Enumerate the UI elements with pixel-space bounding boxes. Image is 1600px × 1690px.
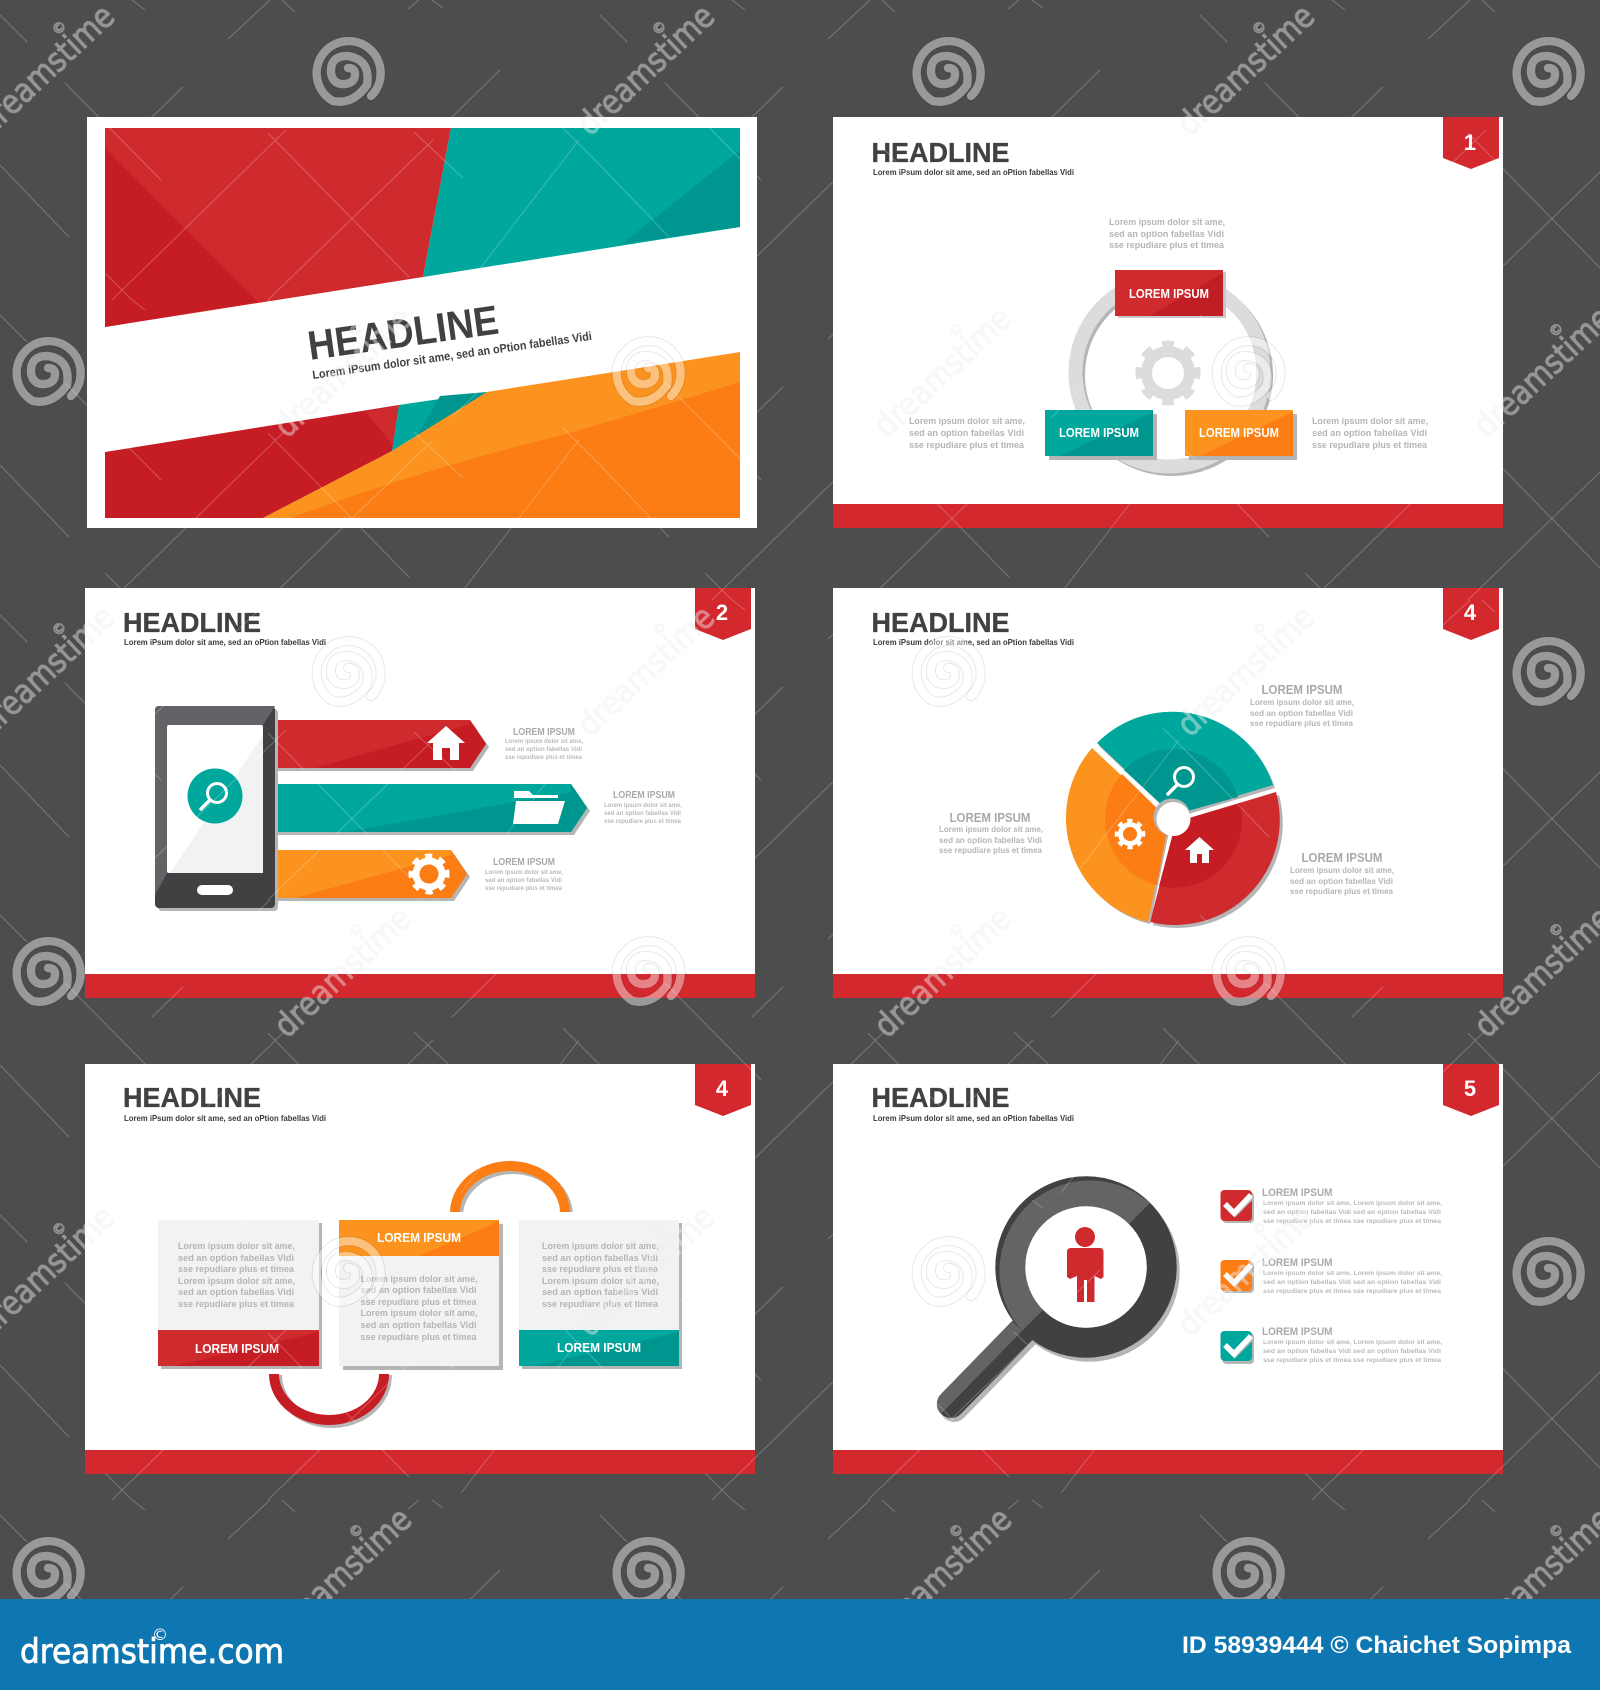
watermark wordmarks: © xyxy=(49,1219,70,1240)
label: red sector: sse repudiare plus et timea xyxy=(1290,886,1393,896)
red arrow xyxy=(275,720,489,771)
left card text xyxy=(178,1241,295,1310)
checklist item red: sed an option fabellas Vidi sed an option fabellas Vidi xyxy=(1263,1209,1441,1216)
watermark wordmarks: © xyxy=(346,320,367,341)
footer logo: dreamstime.com xyxy=(20,1632,284,1672)
left card text: Lorem ipsum dolor sit ame, xyxy=(178,1241,295,1252)
label: red sector: LOREM IPSUM xyxy=(1302,850,1382,865)
cover: small teal facet xyxy=(392,392,487,451)
watermark spiral ghost edges xyxy=(70,336,1286,1596)
right text block: Lorem ipsum dolor sit ame, xyxy=(1312,416,1428,427)
watermark wordmarks: dreamstime xyxy=(569,597,722,744)
watermark wordmarks: © xyxy=(1249,619,1270,640)
middle card xyxy=(339,1220,503,1370)
badge number: 4 xyxy=(1464,600,1477,625)
label: orange sector: sse repudiare plus et timea xyxy=(939,845,1042,855)
badge number: 1 xyxy=(1464,130,1476,155)
left card footer xyxy=(158,1330,319,1366)
checklist item red xyxy=(1220,1187,1442,1225)
icon: folder xyxy=(513,791,565,824)
label: orange arrow: Lorem ipsum dolor sit ame, xyxy=(485,869,563,876)
red connector arc xyxy=(274,1374,387,1423)
footer band xyxy=(0,1599,1600,1690)
label: orange sector xyxy=(939,810,1043,855)
watermark wordmarks: © xyxy=(1546,320,1567,341)
panel: cover slide xyxy=(87,117,757,528)
label: teal arrow: Lorem ipsum dolor sit ame, xyxy=(604,802,682,809)
left text block: sed an option fabellas Vidi xyxy=(909,428,1024,439)
left card text: sed an option fabellas Vidi xyxy=(178,1287,294,1298)
watermark wordmarks: © xyxy=(649,619,670,640)
heading: HEADLINE xyxy=(872,607,1010,638)
checklist item red: sse repudiare plus et timea sse repudiare plus et timea xyxy=(1263,1218,1441,1225)
label: teal sector: Lorem ipsum dolor sit ame, xyxy=(1250,697,1354,707)
footer credit: ID 58939444 © Chaichet Sopimpa xyxy=(1182,1632,1572,1659)
heading: HEADLINE xyxy=(123,607,261,638)
watermark wordmarks: dreamstime xyxy=(866,1499,1019,1646)
right card text: Lorem ipsum dolor sit ame, xyxy=(542,1276,659,1287)
red box: LOREM IPSUM xyxy=(1129,286,1209,301)
checklist item orange: sed an option fabellas Vidi sed an option fabellas Vidi xyxy=(1263,1279,1441,1286)
right card footer: LOREM IPSUM xyxy=(557,1340,641,1355)
top text block xyxy=(1109,217,1225,251)
icon: teal search circle xyxy=(188,768,242,824)
watermark wordmarks: © xyxy=(946,320,967,341)
panel: slide 4 pie diagram xyxy=(833,588,1503,998)
cover: red bottom facet xyxy=(105,405,399,518)
icon: gear xyxy=(1116,820,1144,848)
right text block xyxy=(1312,416,1428,451)
right card text: sse repudiare plus et timea xyxy=(542,1264,659,1275)
watermark wordmarks: © xyxy=(1249,1219,1270,1240)
watermark wordmarks: dreamstime xyxy=(866,898,1019,1045)
icon: house xyxy=(1185,837,1214,863)
right card text: Lorem ipsum dolor sit ame, xyxy=(542,1241,659,1252)
label: orange sector: LOREM IPSUM xyxy=(950,810,1030,825)
label: red arrow: sse repudiare plus et timea xyxy=(505,754,582,761)
checklist item orange: Lorem ipsum dolor sit ame, Lorem ipsum dolor sit ame, xyxy=(1263,1270,1442,1277)
footer bar xyxy=(833,974,1503,998)
watermark wordmarks: dreamstime xyxy=(266,298,419,445)
page badge xyxy=(1443,1064,1499,1116)
cover subtitle: Lorem iPsum dolor sit ame, sed an oPtion fabellas Vidi xyxy=(311,329,593,382)
icon: gear xyxy=(1139,344,1197,402)
top text block: sed an option fabellas Vidi xyxy=(1109,229,1224,240)
heading: HEADLINE xyxy=(123,1082,261,1113)
checklist item orange: sse repudiare plus et timea sse repudiare plus et timea xyxy=(1263,1288,1441,1295)
watermark wordmarks: © xyxy=(946,1521,967,1542)
subheading: Lorem iPsum dolor sit ame, sed an oPtion fabellas Vidi xyxy=(124,1113,326,1123)
label: teal sector: sed an option fabellas Vidi xyxy=(1250,708,1353,718)
checklist item teal: Lorem ipsum dolor sit ame, Lorem ipsum dolor sit ame, xyxy=(1263,1339,1442,1346)
left card text: sse repudiare plus et timea xyxy=(178,1264,295,1275)
label: orange arrow xyxy=(485,857,563,892)
icon: house xyxy=(427,726,465,760)
label: red arrow: sed an option fabellas Vidi xyxy=(505,746,582,753)
cover: red top facet xyxy=(105,128,451,327)
icon: magnifier xyxy=(1168,768,1194,794)
orange connector arc xyxy=(440,1166,580,1219)
icon: gear white xyxy=(411,856,447,892)
hub xyxy=(1154,798,1190,836)
label: orange sector: Lorem ipsum dolor sit ame, xyxy=(939,824,1043,834)
watermark wordmarks: © xyxy=(1546,920,1567,941)
left card footer: LOREM IPSUM xyxy=(195,1341,279,1356)
middle card header: LOREM IPSUM xyxy=(377,1230,461,1245)
watermark wordmarks: © xyxy=(946,920,967,941)
subheading: Lorem iPsum dolor sit ame, sed an oPtion fabellas Vidi xyxy=(873,637,1074,647)
watermark wordmarks: © xyxy=(49,18,70,39)
label: teal arrow: LOREM IPSUM xyxy=(613,790,675,801)
page badge xyxy=(695,1064,751,1116)
watermark wordmarks: dreamstime xyxy=(266,898,419,1045)
right text block: sse repudiare plus et timea xyxy=(1312,440,1428,451)
left text block: Lorem ipsum dolor sit ame, xyxy=(909,416,1025,427)
middle card text xyxy=(360,1274,478,1343)
cover headline: HEADLINE xyxy=(305,297,501,369)
watermark wordmarks: dreamstime xyxy=(266,1499,419,1646)
heading: HEADLINE xyxy=(872,137,1010,168)
watermark wordmarks: dreamstime xyxy=(866,298,1019,445)
watermark wordmarks: © xyxy=(346,1521,367,1542)
watermark wordmarks: dreamstime xyxy=(569,1197,722,1344)
cover: teal top facet xyxy=(423,128,740,277)
orange arrow xyxy=(275,850,470,901)
right card text: sed an option fabellas Vidi xyxy=(542,1253,658,1264)
orange box xyxy=(1185,410,1297,460)
watermark wordmarks: © xyxy=(649,1219,670,1240)
right card text xyxy=(542,1241,659,1310)
right text block: sed an option fabellas Vidi xyxy=(1312,428,1427,439)
badge number: 2 xyxy=(716,600,728,625)
label: red sector: sed an option fabellas Vidi xyxy=(1290,876,1393,886)
checklist item orange: LOREM IPSUM xyxy=(1262,1257,1332,1269)
middle card text: sed an option fabellas Vidi xyxy=(360,1285,476,1296)
label: teal sector: sse repudiare plus et timea xyxy=(1250,718,1353,728)
left card text: sed an option fabellas Vidi xyxy=(178,1253,294,1264)
label: orange arrow: sse repudiare plus et timea xyxy=(485,885,562,892)
label: red arrow xyxy=(505,727,583,761)
label: orange arrow: LOREM IPSUM xyxy=(493,857,555,868)
footer logo: © xyxy=(152,1625,168,1644)
subheading: Lorem iPsum dolor sit ame, sed an oPtion fabellas Vidi xyxy=(124,637,326,647)
badge number: 5 xyxy=(1464,1076,1476,1101)
middle card header xyxy=(339,1220,499,1256)
checklist item red: LOREM IPSUM xyxy=(1262,1187,1332,1199)
watermark wordmarks: © xyxy=(1546,1521,1567,1542)
teal box: LOREM IPSUM xyxy=(1059,425,1139,440)
panel: slide 4b three cards xyxy=(85,1064,755,1474)
top text block: sse repudiare plus et timea xyxy=(1109,240,1225,251)
left card text: sse repudiare plus et timea xyxy=(178,1299,295,1310)
checklist item teal: sed an option fabellas Vidi sed an option fabellas Vidi xyxy=(1263,1348,1441,1355)
watermark wordmarks: © xyxy=(346,920,367,941)
right card text: sse repudiare plus et timea xyxy=(542,1299,659,1310)
red sector xyxy=(1150,792,1283,928)
label: red sector xyxy=(1290,850,1394,896)
label: teal arrow: sed an option fabellas Vidi xyxy=(604,810,681,817)
red box xyxy=(1115,270,1226,318)
checklist item red: Lorem ipsum dolor sit ame, Lorem ipsum dolor sit ame, xyxy=(1263,1200,1442,1207)
icon: person xyxy=(1067,1227,1104,1302)
middle card text: Lorem ipsum dolor sit ame, xyxy=(360,1274,478,1285)
footer bar xyxy=(833,1450,1503,1474)
watermark wordmarks: dreamstime xyxy=(1169,1197,1322,1344)
page badge xyxy=(1443,588,1499,640)
left card text: Lorem ipsum dolor sit ame, xyxy=(178,1276,295,1287)
label: red sector: Lorem ipsum dolor sit ame, xyxy=(1290,865,1394,875)
middle card text: sse repudiare plus et timea xyxy=(360,1297,477,1308)
page badge xyxy=(1443,117,1499,169)
panel: slide 1 cycle diagram xyxy=(833,117,1503,528)
watermark wordmarks: © xyxy=(49,619,70,640)
badge number: 4 xyxy=(716,1076,729,1101)
right card footer xyxy=(519,1330,679,1366)
watermark wordmarks: © xyxy=(649,18,670,39)
orange box: LOREM IPSUM xyxy=(1199,425,1279,440)
cover: orange facet xyxy=(263,352,740,518)
left text block xyxy=(909,416,1025,451)
cycle ring xyxy=(1076,278,1266,469)
label: teal arrow: sse repudiare plus et timea xyxy=(604,818,681,825)
page badge xyxy=(695,588,751,640)
left text block: sse repudiare plus et timea xyxy=(909,440,1025,451)
pie chart xyxy=(1066,712,1283,928)
top text block: Lorem ipsum dolor sit ame, xyxy=(1109,217,1225,228)
checklist item teal: sse repudiare plus et timea sse repudiare plus et timea xyxy=(1263,1357,1441,1364)
right card text: sed an option fabellas Vidi xyxy=(542,1287,658,1298)
middle card text: sse repudiare plus et timea xyxy=(360,1332,477,1343)
panel: slide 2 phone arrows xyxy=(85,588,755,998)
checklist item teal xyxy=(1220,1326,1442,1364)
orange sector xyxy=(1066,748,1171,924)
label: red arrow: LOREM IPSUM xyxy=(513,727,575,738)
label: teal sector xyxy=(1250,682,1354,728)
panel: slide 5 magnifier checklist xyxy=(833,1064,1503,1474)
checklist item orange xyxy=(1220,1257,1442,1295)
middle card text: sed an option fabellas Vidi xyxy=(360,1320,476,1331)
label: orange arrow: sed an option fabellas Vidi xyxy=(485,877,562,884)
heading: HEADLINE xyxy=(872,1082,1010,1113)
label: orange sector: sed an option fabellas Vidi xyxy=(939,835,1042,845)
footer bar xyxy=(85,1450,755,1474)
right card xyxy=(519,1220,682,1369)
teal arrow xyxy=(275,784,590,835)
footer bar xyxy=(833,504,1503,528)
magnifier xyxy=(937,1180,1165,1414)
middle card text: Lorem ipsum dolor sit ame, xyxy=(360,1308,478,1319)
subheading: Lorem iPsum dolor sit ame, sed an oPtion fabellas Vidi xyxy=(873,1113,1074,1123)
footer bar xyxy=(85,974,755,998)
teal sector xyxy=(1097,712,1275,818)
left card xyxy=(158,1220,322,1369)
phone xyxy=(155,706,278,911)
teal box xyxy=(1045,410,1157,460)
subheading: Lorem iPsum dolor sit ame, sed an oPtion fabellas Vidi xyxy=(873,167,1074,177)
label: teal arrow xyxy=(604,790,682,825)
watermark wordmarks: © xyxy=(1249,18,1270,39)
checklist item teal: LOREM IPSUM xyxy=(1262,1326,1332,1338)
watermark wordmarks: dreamstime xyxy=(1169,597,1322,744)
label: teal sector: LOREM IPSUM xyxy=(1262,682,1342,697)
label: red arrow: Lorem ipsum dolor sit ame, xyxy=(505,738,583,745)
